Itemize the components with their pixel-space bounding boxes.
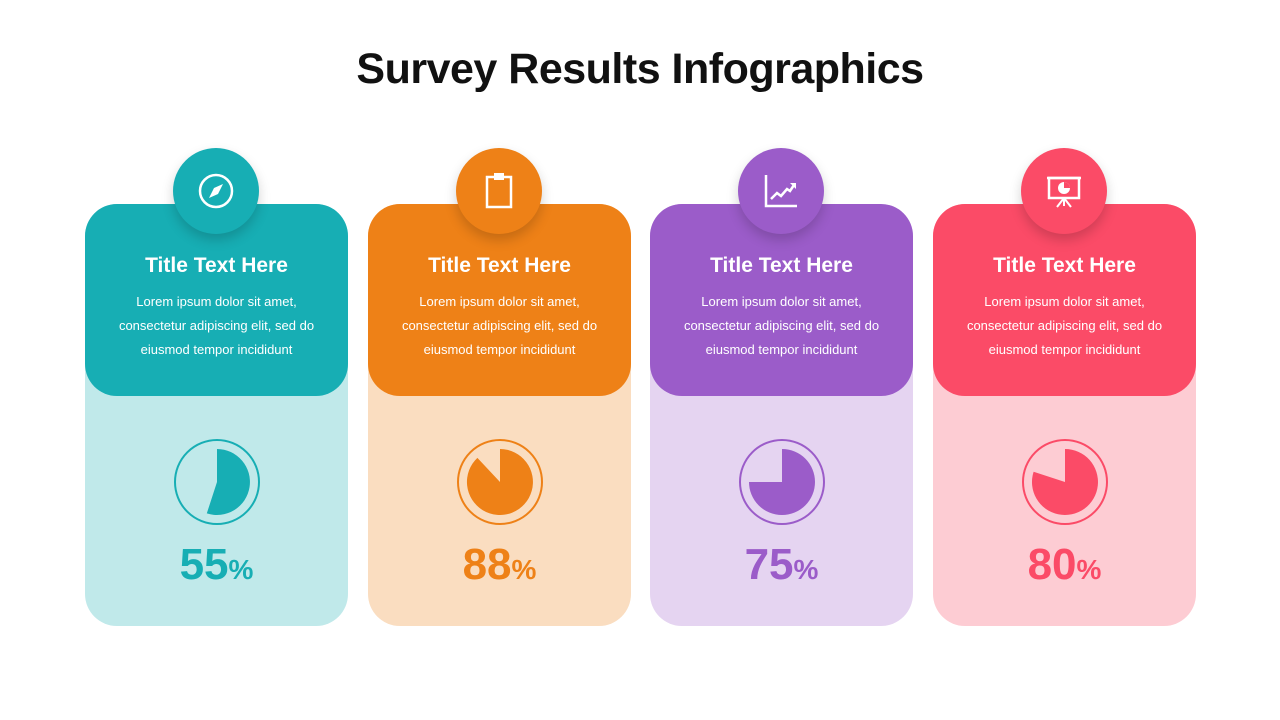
card 4 header: consectetur adipiscing elit, sed do bbox=[967, 318, 1162, 333]
percentage 80%: 80% bbox=[1028, 540, 1101, 589]
card 1 header: eiusmod tempor incididunt bbox=[141, 342, 292, 357]
pie chart 88% bbox=[457, 439, 543, 525]
panel: card 3 purple bbox=[650, 204, 913, 626]
card 1 header: consectetur adipiscing elit, sed do bbox=[119, 318, 314, 333]
card 3 header: Lorem ipsum dolor sit amet, bbox=[701, 294, 862, 309]
card 2 header: Lorem ipsum dolor sit amet, bbox=[419, 294, 580, 309]
card 2 header: eiusmod tempor incididunt bbox=[424, 342, 575, 357]
panel: card 1 teal bbox=[85, 204, 348, 626]
card 3 header: Title Text Here bbox=[710, 254, 853, 277]
card 4 header: Lorem ipsum dolor sit amet, bbox=[984, 294, 1145, 309]
card 1 header: Title Text Here bbox=[145, 254, 288, 277]
icon: compass bbox=[173, 148, 259, 234]
panel: card 4 red bbox=[933, 204, 1196, 626]
card 3 header: eiusmod tempor incididunt bbox=[706, 342, 857, 357]
icon: presentation bbox=[1021, 148, 1107, 234]
card 3 header bbox=[650, 204, 913, 396]
card 4 header: eiusmod tempor incididunt bbox=[989, 342, 1140, 357]
icon: line chart bbox=[738, 148, 824, 234]
percentage 55%: 55% bbox=[180, 540, 253, 589]
card 2 header: Title Text Here bbox=[428, 254, 571, 277]
pie chart 55% bbox=[174, 439, 260, 525]
title: Survey Results Infographics bbox=[356, 45, 924, 93]
card 2 header bbox=[368, 204, 631, 396]
icon: clipboard bbox=[456, 148, 542, 234]
pie chart 80% bbox=[1022, 439, 1108, 525]
percentage 75%: 75% bbox=[745, 540, 818, 589]
card 3 header: consectetur adipiscing elit, sed do bbox=[684, 318, 879, 333]
percentage 88%: 88% bbox=[463, 540, 536, 589]
pie chart 75% bbox=[739, 439, 825, 525]
card 4 header bbox=[933, 204, 1196, 396]
card 1 header: Lorem ipsum dolor sit amet, bbox=[136, 294, 297, 309]
card 1 header bbox=[85, 204, 348, 396]
panel: card 2 orange bbox=[368, 204, 631, 626]
card 2 header: consectetur adipiscing elit, sed do bbox=[402, 318, 597, 333]
card 4 header: Title Text Here bbox=[993, 254, 1136, 277]
